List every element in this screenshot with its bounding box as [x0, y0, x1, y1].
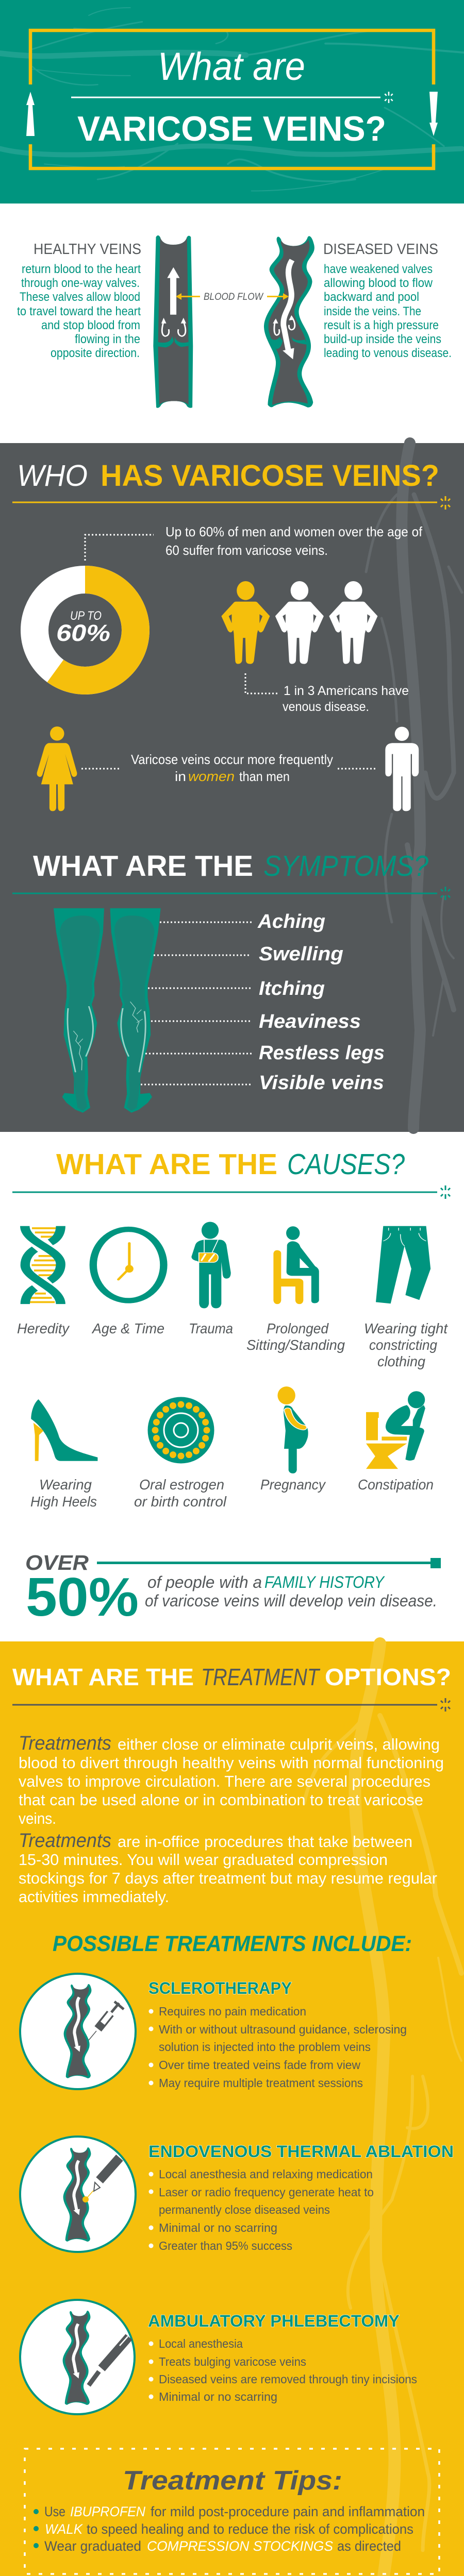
- text block: treatments: activities immediately.: [19, 1888, 169, 1906]
- diseased veins text: allowing blood to flow: [324, 276, 433, 290]
- healthy veins text: to travel toward the heart: [17, 304, 141, 318]
- icon: thermal ablation vein and probe: [20, 2137, 136, 2252]
- text: endovenous thermal ablation: Minimal or no scarring: [159, 2221, 277, 2234]
- stat: over 50 percent: of people with a: [147, 1573, 262, 1591]
- icon: birth control pills: [147, 1397, 214, 1463]
- panel: treatment tips: to speed healing and to reduce the risk of complications: [87, 2521, 413, 2537]
- text block: treatments: Treatments: [19, 1830, 111, 1852]
- divider: [12, 887, 450, 900]
- panel: healthy vs diseased veins: [17, 235, 452, 408]
- heading: what are the symptoms: [33, 850, 428, 883]
- icon: constipation: [366, 1391, 425, 1469]
- symptoms list: [141, 911, 385, 1094]
- heading: what are the causes: CAUSES?: [287, 1148, 405, 1181]
- heading: what are the symptoms: SYMPTOMS?: [263, 850, 428, 883]
- text: ambulatory phlebectomy: Local anesthesia: [159, 2337, 243, 2350]
- callout: 60 percent: Up to 60% of men and women over the age of: [165, 524, 423, 539]
- text: ambulatory phlebectomy: Diseased veins are removed through tiny incisions: [159, 2372, 417, 2386]
- callout: women vs men: Varicose veins occur more frequently: [131, 752, 333, 767]
- text: endovenous thermal ablation: Greater than 95% success: [159, 2239, 292, 2252]
- icon: phlebectomy vein and tool: [20, 2300, 135, 2414]
- symptoms list: Aching: [257, 911, 325, 933]
- panel: treatment tips: Treatment Tips:: [123, 2466, 342, 2496]
- panel: causes: [12, 1148, 450, 1628]
- text: ambulatory phlebectomy: Minimal or no scarring: [159, 2390, 277, 2403]
- header banner: [0, 0, 464, 204]
- healthy veins text: return blood to the heart: [22, 262, 141, 276]
- callout: women vs men: [81, 752, 377, 784]
- panel: treatment tips: WALK: [45, 2521, 83, 2537]
- text: sclerotherapy: With or without ultrasound guidance, sclerosing: [159, 2023, 407, 2036]
- callout: 1 in 3: [245, 673, 409, 714]
- icon: pregnancy: [277, 1386, 308, 1473]
- diseased vein illustration: [264, 236, 314, 408]
- symptoms list: Heaviness: [259, 1011, 361, 1032]
- cause labels row 1: constricting: [369, 1337, 437, 1353]
- heading: possible treatments: POSSIBLE TREATMENTS INCLUDE:: [53, 1931, 412, 1956]
- heading: what are the symptoms: WHAT ARE THE: [33, 850, 253, 883]
- panel: treatment tips: Use: [44, 2504, 65, 2519]
- text block: treatments: veins.: [19, 1809, 56, 1827]
- icon: heredity DNA: [25, 1226, 61, 1304]
- text: sclerotherapy: May require multiple treatment sessions: [159, 2076, 363, 2090]
- cause labels row 1: Sitting/Standing: [246, 1337, 345, 1353]
- cause labels row 1: Heredity: [17, 1320, 70, 1336]
- callout: women vs men: in: [175, 769, 186, 784]
- symptoms list: Visible veins: [259, 1072, 384, 1094]
- heading: who has varicose veins: WHO: [17, 459, 88, 493]
- text block: treatments: Treatments: [19, 1733, 111, 1754]
- healthy veins text: and stop blood from: [41, 318, 140, 332]
- callout: 60 percent: 60 suffer from varicose veins.: [165, 543, 328, 558]
- text: sclerotherapy: Over time treated veins fade from view: [159, 2058, 361, 2072]
- stat: over 50 percent: 50%: [26, 1567, 139, 1628]
- cause labels row 1: Age & Time: [91, 1320, 164, 1336]
- callout: 60 percent: [85, 524, 423, 561]
- title divider: [71, 92, 393, 103]
- heading: what are the causes: [56, 1148, 405, 1181]
- heading: treatment options: OPTIONS?: [325, 1664, 451, 1690]
- text: ambulatory phlebectomy: [148, 2312, 417, 2403]
- icon: prolonged sitting: [273, 1226, 319, 1304]
- cause labels row 1: Wearing tight: [364, 1320, 448, 1336]
- diseased veins text: [323, 241, 452, 360]
- panel: treatment tips: COMPRESSION STOCKINGS: [147, 2538, 333, 2554]
- callout: women vs men: women: [188, 769, 235, 784]
- healthy veins text: through one-way valves.: [21, 276, 140, 290]
- text: endovenous thermal ablation: ENDOVENOUS THERMAL ABLATION: [148, 2142, 454, 2161]
- icon: woman: [37, 726, 77, 811]
- text: endovenous thermal ablation: [148, 2142, 454, 2252]
- arrow: down: [429, 92, 438, 136]
- panel: treatment options: [0, 1641, 464, 2576]
- text: endovenous thermal ablation: Local anesthesia and relaxing medication: [159, 2167, 373, 2181]
- illustration: legs: [54, 908, 161, 1113]
- text: sclerotherapy: SCLEROTHERAPY: [148, 1979, 292, 1997]
- cause labels row 1: Prolonged: [267, 1320, 329, 1336]
- healthy veins text: These valves allow blood: [20, 290, 140, 304]
- stat: over 50 percent: of varicose veins will develop vein disease.: [145, 1591, 437, 1610]
- text: sclerotherapy: [148, 1979, 407, 2090]
- cause labels row 1: [17, 1320, 448, 1369]
- text block: treatments: either close or eliminate culprit veins, allowing: [118, 1735, 440, 1753]
- title: VARICOSE VEINS?: VARICOSE VEINS?: [77, 109, 386, 148]
- divider: [12, 1185, 450, 1199]
- cause labels row 1: Trauma: [189, 1320, 233, 1336]
- cause labels row 1: clothing: [377, 1353, 425, 1369]
- callout: women vs men: than men: [239, 769, 290, 784]
- heading: treatment options: WHAT ARE THE: [12, 1664, 194, 1690]
- diseased veins text: build-up inside the veins: [324, 332, 441, 346]
- blood flow label: [176, 292, 289, 302]
- heading: what are the causes: WHAT ARE THE: [56, 1148, 277, 1181]
- divider: [12, 1698, 450, 1711]
- symptoms list: Swelling: [259, 943, 343, 965]
- icon: high heels: [31, 1399, 97, 1461]
- callout: 1 in 3: 1 in 3 Americans have: [284, 684, 409, 698]
- icon: tight clothing: [376, 1226, 430, 1303]
- icon: man: [385, 727, 419, 811]
- heading: treatment options: TREATMENT: [201, 1664, 320, 1690]
- arrow: up: [26, 92, 35, 136]
- donut chart: up to 60%: [35, 580, 136, 681]
- heading: treatment options: [12, 1664, 451, 1690]
- icon: trauma: [191, 1222, 231, 1308]
- text: sclerotherapy: Requires no pain medication: [159, 2005, 306, 2018]
- healthy veins text: opposite direction.: [51, 346, 140, 360]
- text block: treatments: that can be used alone or in combination to treat varicose: [19, 1791, 423, 1809]
- healthy veins text: [17, 241, 141, 360]
- symptoms list: Restless legs: [259, 1042, 385, 1064]
- icon: three people, one highlighted: [221, 581, 377, 664]
- callout: 1 in 3: venous disease.: [283, 700, 369, 714]
- diseased veins text: result is a high pressure: [324, 318, 439, 332]
- donut chart: up to 60%: UP TO: [70, 609, 102, 623]
- title: What are: What are: [158, 45, 305, 89]
- icon: clock: [93, 1229, 163, 1300]
- cause labels row 2: High Heels: [30, 1494, 97, 1510]
- panel: treatment tips: [25, 2449, 439, 2574]
- cause labels row 2: Oral estrogen: [139, 1477, 224, 1493]
- text: ambulatory phlebectomy: Treats bulging varicose veins: [159, 2355, 306, 2368]
- blood flow label: BLOOD FLOW: [204, 292, 264, 302]
- donut chart: up to 60%: 60%: [56, 620, 110, 646]
- healthy veins text: flowing in the: [75, 332, 140, 346]
- cause labels row 2: [30, 1477, 434, 1510]
- text block: treatments: stockings for 7 days after treatment but may resume regular: [19, 1869, 437, 1887]
- text: ambulatory phlebectomy: AMBULATORY PHLEBECTOMY: [148, 2312, 400, 2330]
- panel: treatment tips: Wear graduated: [44, 2538, 141, 2554]
- symptoms list: Itching: [259, 978, 325, 999]
- cause labels row 2: Wearing: [39, 1477, 92, 1493]
- divider: [12, 496, 450, 510]
- stat: over 50 percent: FAMILY HISTORY: [264, 1573, 385, 1591]
- cause labels row 2: or birth control: [134, 1494, 227, 1510]
- icon: sclerotherapy vein and syringe: [20, 1974, 136, 2089]
- title frame: [30, 30, 434, 168]
- text: sclerotherapy: solution is injected into the problem veins: [159, 2040, 371, 2054]
- diseased veins text: have weakened valves: [324, 262, 433, 276]
- text: endovenous thermal ablation: permanently close diseased veins: [159, 2203, 330, 2216]
- panel: treatment tips: as directed: [337, 2538, 401, 2554]
- cause labels row 2: Constipation: [358, 1477, 434, 1493]
- diseased veins text: DISEASED VEINS: [323, 241, 438, 258]
- healthy veins text: HEALTHY VEINS: [34, 241, 141, 258]
- stat: over 50 percent: [25, 1551, 441, 1628]
- healthy vein illustration: [153, 235, 193, 408]
- panel: treatment tips: for mild post-procedure pain and inflammation: [151, 2504, 425, 2519]
- panel: treatment tips: IBUPROFEN: [70, 2504, 145, 2519]
- text: endovenous thermal ablation: Laser or radio frequency generate heat to: [159, 2185, 374, 2199]
- text block: treatments: [19, 1733, 444, 1906]
- text block: treatments: valves to improve circulation. There are several procedures: [19, 1772, 430, 1790]
- text block: treatments: 15-30 minutes. You will wear graduated compression: [19, 1851, 388, 1869]
- panel: who has varicose veins and symptoms: [0, 443, 464, 1132]
- diseased veins text: inside the veins. The: [324, 304, 421, 318]
- cause labels row 2: Pregnancy: [260, 1477, 326, 1493]
- heading: who has varicose veins: HAS VARICOSE VEINS?: [101, 459, 439, 493]
- stat: over 50 percent: OVER: [25, 1551, 89, 1574]
- diseased veins text: backward and pool: [324, 290, 419, 304]
- text block: treatments: blood to divert through healthy veins with normal functioning: [19, 1754, 444, 1772]
- text block: treatments: are in-office procedures that take between: [118, 1833, 412, 1851]
